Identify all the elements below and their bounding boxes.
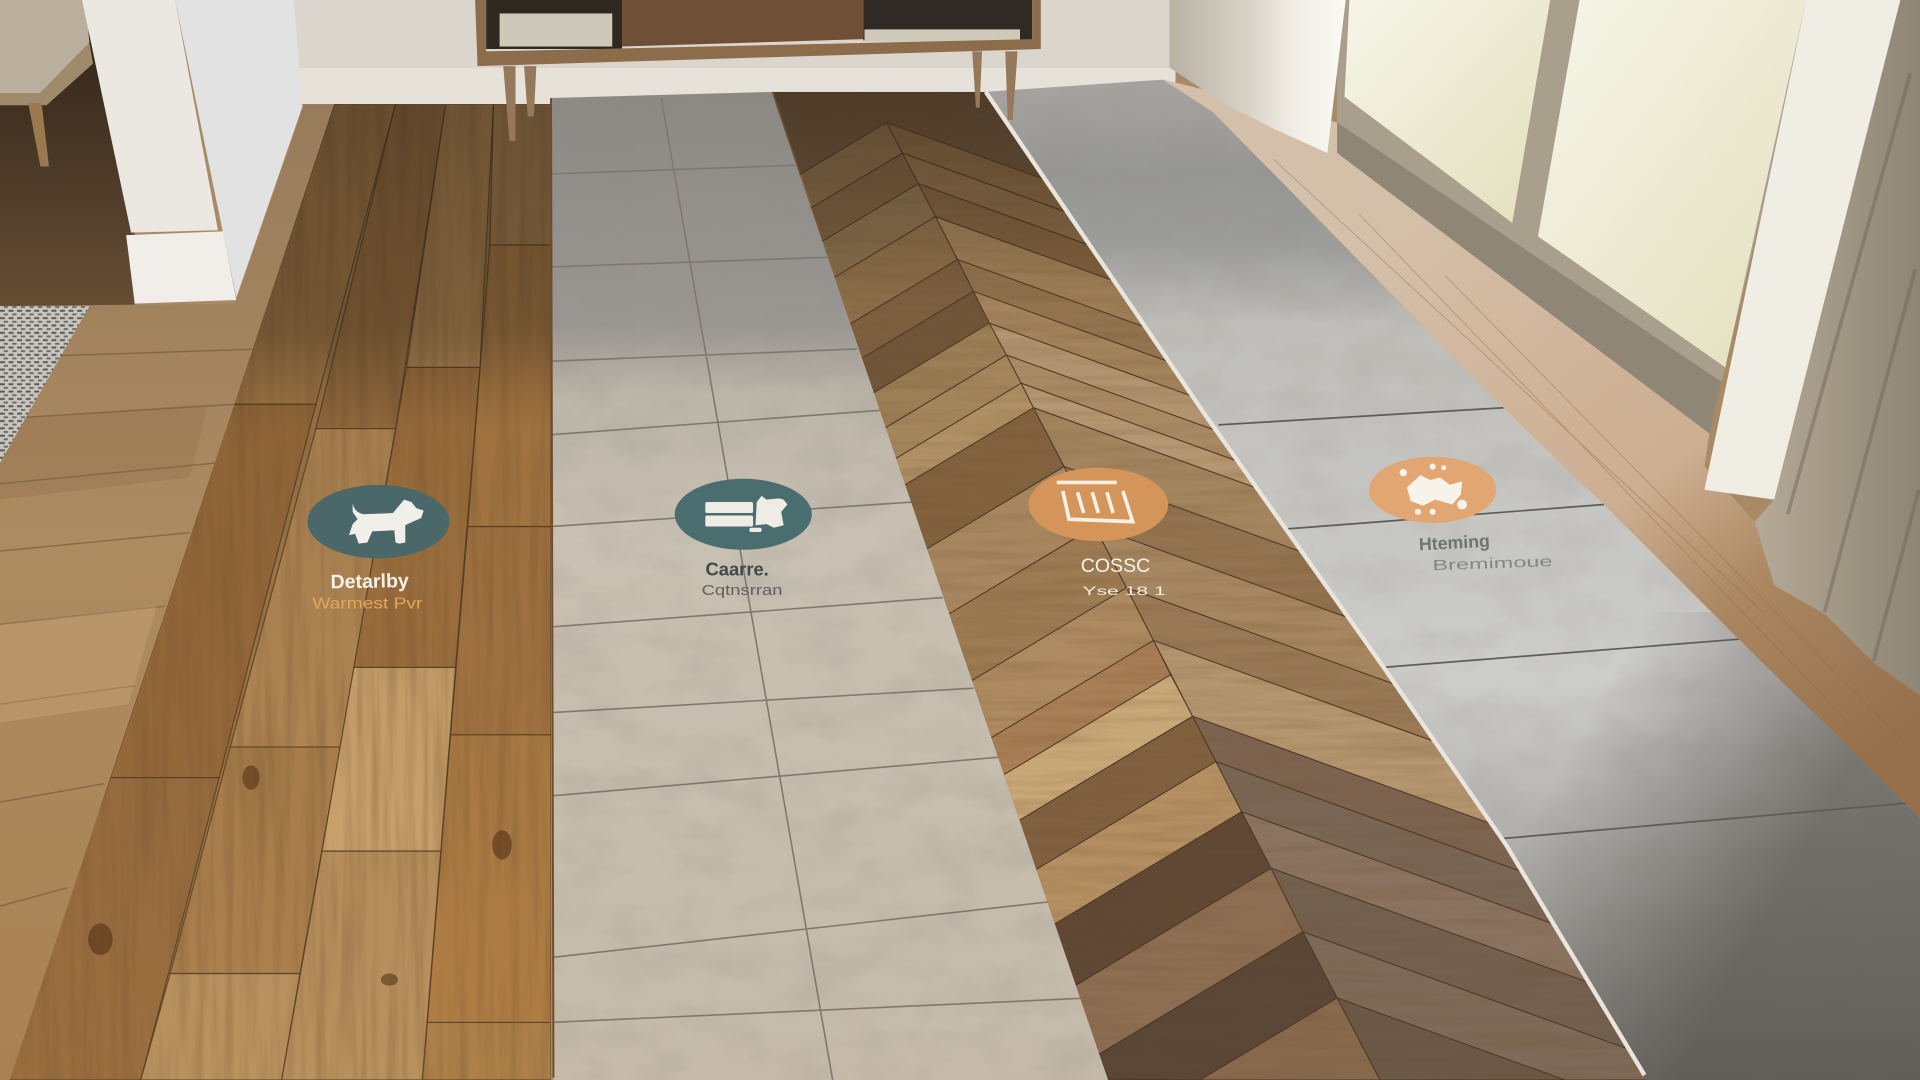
lane 3: herringbone parquet [772,92,1647,1080]
lane 4: grey slate tiles [980,73,1920,1080]
sheer curtain [1169,0,1346,153]
icon: card and pet [705,496,787,532]
badge circle: peach [1369,457,1496,523]
lane divider: metal strip [986,92,1644,1075]
books [500,13,612,47]
badge circle: teal [675,479,812,550]
background: upper left room [0,0,135,306]
centre panel [622,0,863,47]
legs [503,51,1018,141]
console table [475,0,1041,141]
heading: cost: COSSC [1081,555,1150,577]
curtain [1755,0,1920,696]
heading: care: Caarre. [706,559,769,580]
lane 4 badge: heating [1369,457,1553,574]
icon: dog [349,500,424,544]
herringbone right half [886,122,1647,1080]
table frame [475,0,1041,66]
icon: basket [1057,482,1133,522]
magazines [864,29,1020,42]
cubby left [486,0,622,49]
heading: heating: Hteming [1418,531,1490,554]
subtext: heating: Bremimoue [1432,554,1553,574]
heading: durability: Detarlby [330,570,409,593]
oak plank boards [6,104,551,1080]
lane 5: light wood [1163,80,1920,818]
stone tile grout [551,98,1090,1080]
herringbone left half [800,122,1380,1080]
subtext: cost: Yse 18 1 [1082,584,1166,598]
cubby right [863,0,1032,40]
white window frame [1704,0,1900,500]
lane divider: wood to stone [551,98,553,1078]
badge circle: teal [307,485,449,558]
lane 2: stone tiles [545,86,1120,1080]
slate tile grout [1218,408,1905,839]
window [1337,0,1812,382]
badge circle: orange [1029,468,1168,541]
lane 3 badge: cost [1029,468,1168,598]
window sill [1337,122,1722,433]
icon: splash [1400,463,1467,515]
subtext: care: Cqtnsrran [702,583,782,599]
lane 2 badge: care [675,479,812,599]
left floor planks [0,104,334,1080]
knots [88,765,512,986]
subtext: durability: Warmest Pvr [312,596,422,613]
lane 1 badge: durability [307,485,449,613]
rug [0,306,89,463]
lane 1: oak planks [0,98,563,1080]
white column [82,0,302,304]
